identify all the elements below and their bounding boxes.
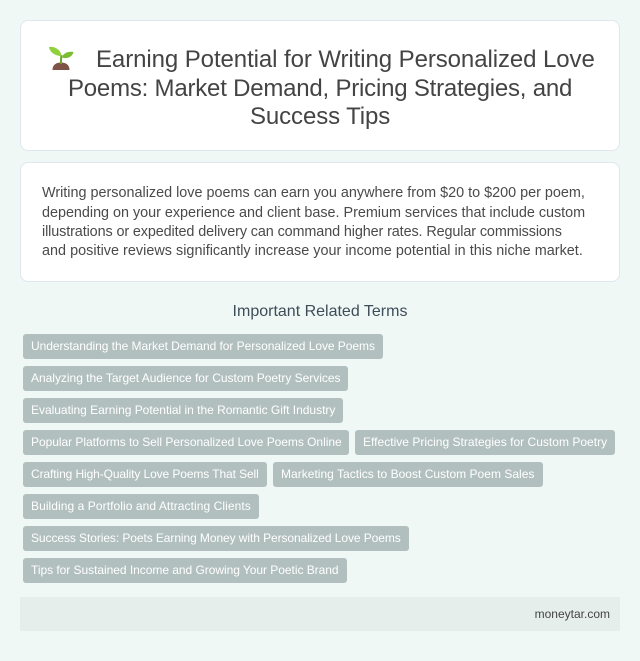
tag	[23, 462, 267, 487]
tag	[23, 334, 383, 359]
tag	[23, 494, 259, 519]
panel: related term tags	[23, 334, 615, 583]
tag: Tips for Sustained Income and Growing Your Poetic Brand	[31, 563, 339, 577]
tag: Success Stories: Poets Earning Money with Personalized Love Poems	[31, 531, 401, 545]
tag: Analyzing the Target Audience for Custom Poetry Services	[31, 371, 340, 385]
tag	[23, 430, 349, 455]
tag	[23, 366, 348, 391]
summary text: illustrations or expedited delivery can command higher rates. Regular commissions	[42, 224, 562, 240]
tag	[23, 558, 347, 583]
tag	[23, 398, 343, 423]
title: Success Tips	[250, 103, 390, 130]
tag	[355, 430, 615, 455]
tag	[273, 462, 543, 487]
tag: Building a Portfolio and Attracting Clients	[31, 499, 251, 513]
panel: title card	[20, 20, 620, 151]
footer bar	[20, 597, 620, 631]
summary text: depending on your experience and client base. Premium services that include custom	[42, 205, 585, 221]
summary text: and positive reviews significantly increase your income potential in this niche market.	[42, 243, 583, 259]
title: Earning Potential for Writing Personalized Love	[96, 46, 595, 73]
tag: Evaluating Earning Potential in the Romantic Gift Industry	[31, 403, 335, 417]
title: Poems: Market Demand, Pricing Strategies, and	[68, 75, 572, 102]
tag: Understanding the Market Demand for Personalized Love Poems	[31, 339, 375, 353]
footer source text: moneytar.com	[535, 607, 610, 621]
panel: summary card	[20, 162, 620, 282]
heading: related terms: Important Related Terms	[233, 303, 407, 320]
summary text	[42, 185, 585, 259]
tag: Crafting High-Quality Love Poems That Sell	[31, 467, 259, 481]
tag: Effective Pricing Strategies for Custom Poetry	[363, 435, 607, 449]
tag: Popular Platforms to Sell Personalized Love Poems Online	[31, 435, 342, 449]
tag: Marketing Tactics to Boost Custom Poem Sales	[281, 467, 534, 481]
summary text: Writing personalized love poems can earn you anywhere from $20 to $200 per poem,	[42, 185, 585, 201]
tag	[23, 526, 409, 551]
icon: seedling	[49, 46, 74, 70]
title	[68, 46, 595, 130]
